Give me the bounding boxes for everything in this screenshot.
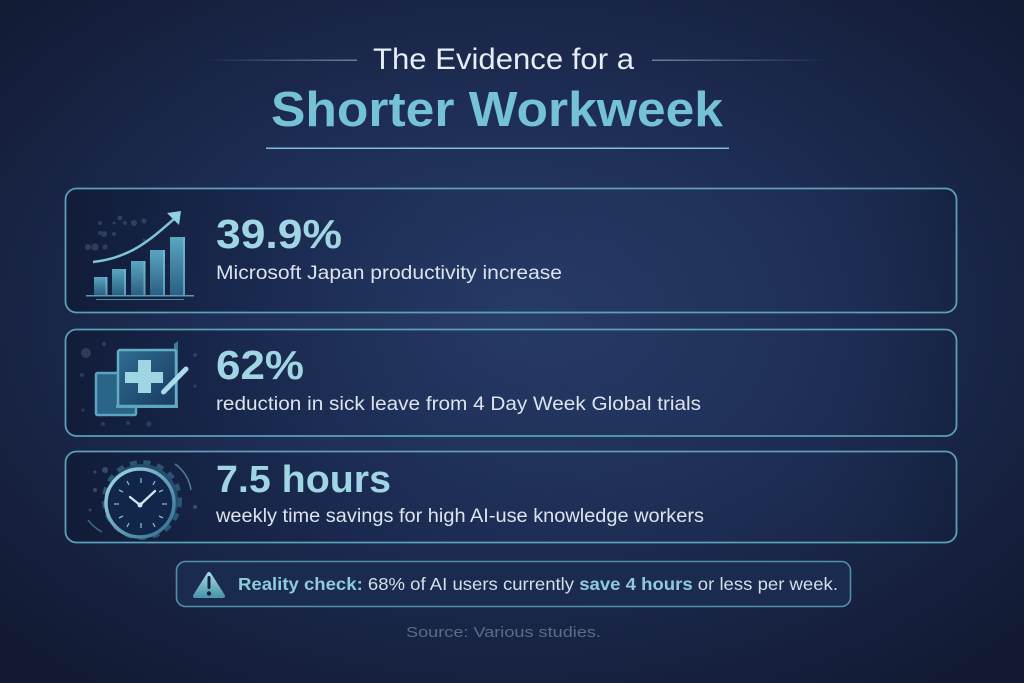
icon: medical cross cards — [80, 341, 197, 426]
title block — [205, 43, 832, 149]
callout text: Reality check: 68% of AI users currently save 4 hours or less per week. — [238, 574, 838, 594]
label: Microsoft Japan: Microsoft Japan productivity increase — [216, 263, 562, 284]
icon: clock in gear — [88, 463, 197, 537]
icon: warning triangle — [195, 574, 223, 596]
source note: Source: Various studies. — [406, 624, 601, 641]
title line one: The Evidence for a — [373, 43, 634, 76]
title line two: Shorter Workweek — [271, 83, 724, 137]
label: time savings: weekly time savings for high AI-use knowledge workers — [215, 506, 704, 527]
panel: Microsoft Japan productivity — [66, 188, 956, 312]
panel: time savings — [66, 452, 956, 542]
callout: reality check — [176, 562, 850, 606]
stat: 39.9%: 39.9% — [216, 211, 342, 257]
panel: sick leave — [66, 330, 956, 436]
stat: 7.5 hours: 7.5 hours — [216, 459, 391, 501]
label: sick leave: reduction in sick leave from 4 Day Week Global trials — [216, 394, 701, 415]
stat: 62%: 62% — [216, 342, 304, 388]
icon: rising bar chart — [85, 211, 194, 300]
